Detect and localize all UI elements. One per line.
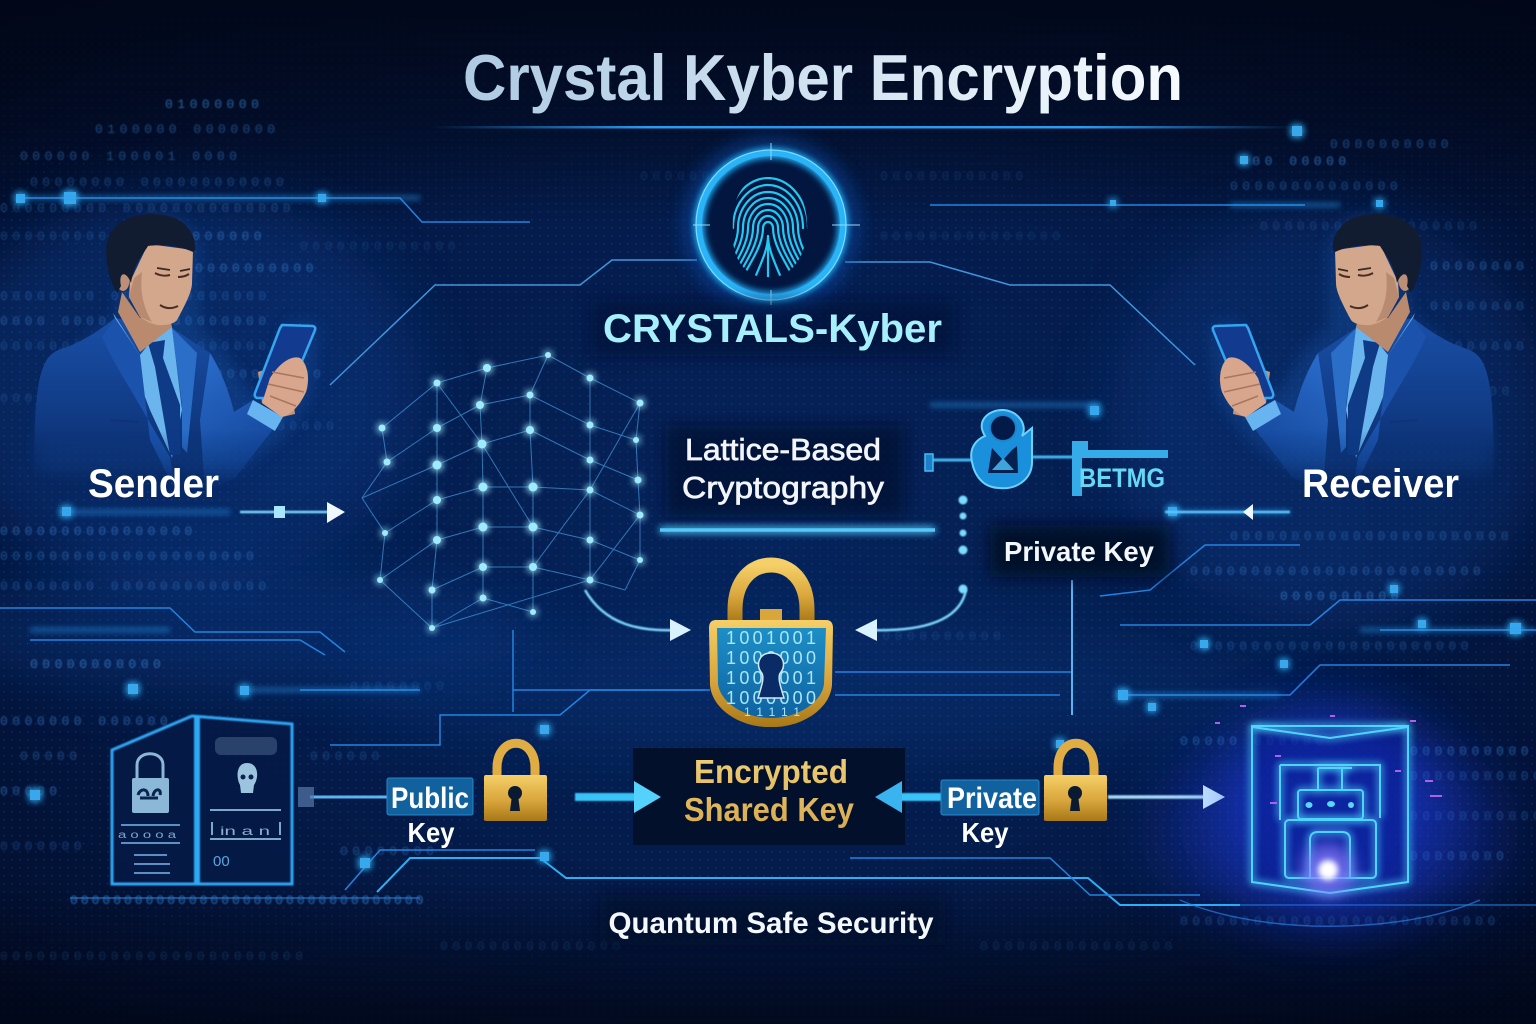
label: Quantum Safe Security	[600, 895, 945, 945]
binary digits on lock: 1000000	[726, 688, 816, 708]
binary data streams: 000000000000000	[0, 391, 185, 406]
binary data streams: 000000000	[0, 229, 111, 244]
lattice lines	[362, 355, 640, 628]
panel: Encrypted Shared Key	[633, 748, 905, 845]
binary digits on lock: 1000000	[726, 648, 816, 668]
arrow: private key to lock	[855, 590, 966, 641]
label: Lattice-Based Cryptography	[665, 425, 905, 517]
heading: CRYSTALS-Kyber: CRYSTALS-Kyber	[603, 307, 942, 351]
public key label: Public	[391, 782, 469, 815]
arrow: private key to shared key	[875, 781, 942, 813]
public key label: Key	[408, 817, 455, 848]
binary data streams: 000000	[310, 749, 384, 764]
icon: server with lock and skull	[112, 716, 314, 884]
arrow: receiver to lattice	[1165, 504, 1290, 520]
binary digits on lock	[726, 628, 816, 719]
badge	[387, 778, 473, 815]
binary data streams: 00000000000000	[1230, 179, 1402, 194]
title rule	[430, 126, 1300, 128]
binary data streams: 00000000	[1430, 339, 1528, 354]
icon: server with lock and skull: in a n	[220, 824, 270, 838]
badge	[941, 780, 1039, 815]
label: Lattice-Based Cryptography: Lattice-Based	[685, 432, 881, 467]
binary data streams: 00000000	[240, 419, 338, 434]
label: Lattice-Based Cryptography: Cryptography	[682, 470, 885, 505]
binary data streams: 0000000000 00000000000	[0, 339, 271, 354]
binary data streams: 00000000	[340, 844, 438, 859]
binary data streams: 00000 000000	[1180, 734, 1328, 749]
icon: key with lock	[925, 410, 1168, 496]
binary digits on lock: 1001001	[726, 628, 816, 648]
binary data streams: 000000000000000000000000000000000	[70, 893, 426, 908]
binary data streams: 00000000	[1410, 849, 1508, 864]
binary data streams: 0000000000	[1410, 744, 1533, 759]
panel: Encrypted Shared Key: Shared Key	[684, 791, 855, 828]
binary data streams: 0000000000	[195, 261, 318, 276]
circuit traces	[0, 198, 1536, 926]
binary data streams: 0000000	[0, 839, 86, 854]
icon: gold padlock left	[484, 743, 547, 821]
icon: gold padlock right	[1044, 743, 1107, 821]
icon: server with lock and skull: a o o o a	[118, 830, 177, 841]
icon: central gold padlock	[709, 565, 833, 727]
binary data streams: 0100000 0000000	[95, 122, 280, 137]
binary data streams: 00000	[20, 749, 82, 764]
binary data streams: 00000000 000000000000	[30, 175, 288, 190]
binary data streams: 0000000000000000000000000	[0, 949, 308, 964]
binary data streams: 00000000000	[870, 629, 1005, 644]
title: Crystal Kyber Encryption	[463, 41, 1183, 114]
binary data streams: 0000000	[180, 229, 266, 244]
binary data streams: 0000000 000000	[0, 714, 172, 729]
binary data streams: 00000	[0, 784, 62, 799]
binary data streams: 000000000000000	[880, 229, 1065, 244]
binary data streams: 00000000 0000000000000	[0, 579, 271, 594]
binary data streams: 000000000000	[880, 169, 1028, 184]
binary data streams: 000000000000000000000000	[1190, 564, 1485, 579]
label: Quantum Safe Security: Quantum Safe Security	[608, 907, 934, 940]
lock on panel	[137, 754, 163, 778]
binary data streams: 000000000000000	[440, 939, 625, 954]
panel: Encrypted Shared Key: Encrypted	[694, 753, 848, 790]
binary data streams: 0000000000000000	[980, 939, 1177, 954]
binary data streams: 00000000	[1430, 259, 1528, 274]
arrow: to secure device	[1108, 785, 1225, 809]
binary data streams: 0000 0000 000000000000	[0, 314, 271, 329]
body	[709, 620, 833, 727]
arrow: lattice to lock	[585, 590, 691, 641]
binary data streams: 0000000000000000	[0, 524, 197, 539]
binary data streams: 0000000000	[1280, 589, 1403, 604]
private key label: Key	[962, 817, 1009, 848]
glowing nodes	[16, 126, 1521, 868]
label: Private Key (upper): Private Key	[1004, 536, 1154, 567]
label: Sender: Sender	[88, 462, 219, 506]
skull	[238, 763, 257, 793]
binary digits on lock: 11111	[744, 705, 800, 719]
binary data streams: 00000000000000000000000	[1230, 529, 1513, 544]
binary data streams: 00000000	[1430, 299, 1528, 314]
icon: fingerprint ring	[681, 135, 861, 315]
binary data streams: 000000	[1440, 384, 1514, 399]
binary data streams: 000 00000	[1240, 154, 1351, 169]
label: Private Key (upper)	[990, 525, 1170, 577]
binary data streams: 00000000000000000000000000	[1180, 914, 1500, 929]
receiver figure	[1208, 214, 1494, 506]
shackle	[735, 565, 807, 622]
binary digits on lock: 1000001	[726, 668, 816, 688]
sender figure	[34, 214, 320, 506]
private key label	[941, 780, 1039, 848]
binary data streams: 000000000000000000	[1260, 219, 1481, 234]
icon: quantum secure device	[1215, 705, 1442, 910]
binary data streams: 000000000 00000000000000	[0, 201, 295, 216]
soft horizontal light streaks	[20, 198, 1536, 695]
binary data streams: 00000000000	[190, 367, 325, 382]
garbled key label: BETMG	[1079, 463, 1165, 493]
binary data streams: 000000	[640, 169, 714, 184]
icon: server with lock and skull: 00	[213, 853, 230, 870]
label: Receiver: Receiver	[1302, 462, 1459, 506]
binary data streams: 0000000000000	[300, 239, 460, 254]
arrow: public key to shared key	[575, 781, 661, 813]
binary data streams: 00000000000	[30, 657, 165, 672]
private key label: Private	[947, 782, 1037, 815]
binary data streams: 00000000000000000000000	[1190, 639, 1473, 654]
lattice nodes	[377, 352, 644, 631]
binary data streams: 000000000000000000000	[0, 549, 258, 564]
panel lines	[121, 825, 180, 873]
dotted connector	[958, 496, 968, 594]
binary data streams: 0000000000	[1330, 137, 1453, 152]
arrow: sender to lattice	[240, 502, 345, 523]
lattice network	[362, 352, 644, 631]
key bar	[1072, 441, 1168, 496]
underline glow bar	[660, 528, 935, 532]
binary data streams: 000000 100001 0000	[20, 149, 241, 164]
public key label	[387, 778, 473, 848]
keyhole	[758, 653, 784, 698]
binary data streams: 01000000	[165, 97, 263, 112]
binary data streams: 00000000	[350, 679, 448, 694]
binary data streams: 00000000 0000000000000	[0, 289, 271, 304]
